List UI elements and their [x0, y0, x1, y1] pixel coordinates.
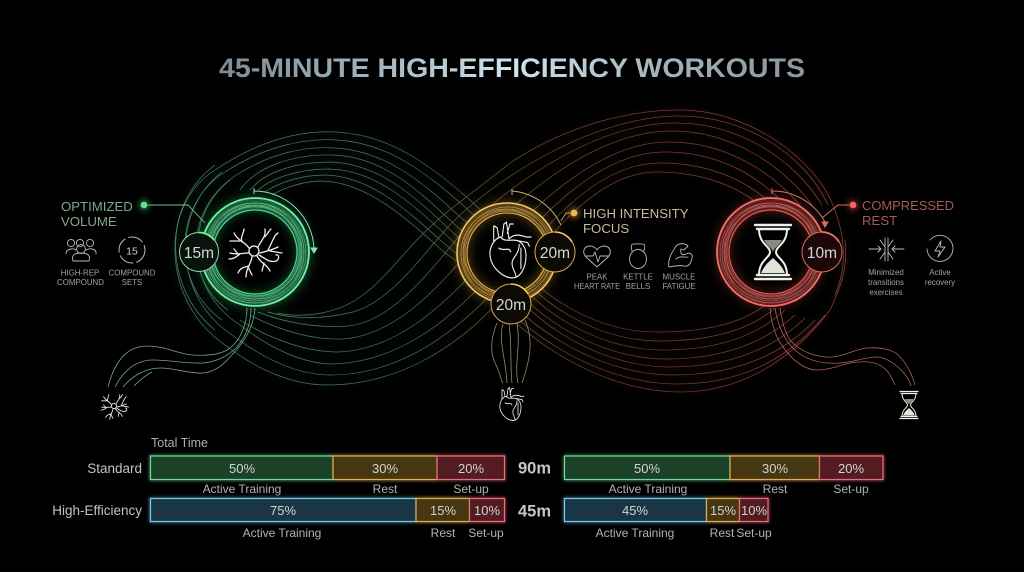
bar: standard right: 30% [762, 461, 788, 476]
tails: yellow to heart [492, 320, 530, 383]
bar: high-efficiency left: 75% [270, 503, 296, 518]
row label: standard: Standard [87, 461, 142, 476]
callout: high intensity focus: FOCUS [583, 221, 629, 236]
label: kettle bells: BELLS [626, 282, 650, 291]
icon: high-rep compound people [66, 239, 96, 261]
bar: standard left: 20% [458, 461, 484, 476]
callout: compressed rest: REST [862, 213, 897, 228]
labels: high-efficiency right: Active Training [596, 526, 674, 540]
icon: 15 compound sets [119, 237, 145, 263]
label: muscle fatigue [662, 272, 696, 291]
icon: muscle [669, 244, 692, 267]
bar: high-efficiency right: 10% [741, 503, 767, 518]
label: peak heart rate: HEART RATE [574, 282, 620, 291]
ring: green neuron [201, 198, 309, 306]
label: minimized transitions exercises: exercises [869, 288, 903, 297]
icon: small hourglass [900, 392, 918, 418]
labels: high-efficiency left: Rest [431, 526, 456, 540]
icon: active recovery [927, 235, 953, 261]
label: muscle fatigue: MUSCLE [663, 272, 695, 282]
label: peak heart rate: PEAK [586, 272, 608, 282]
time badge: 20m bottom: 20m [496, 297, 526, 314]
arrow: green arc [254, 188, 317, 253]
labels: high-efficiency left: Set-up [468, 526, 504, 540]
labels: standard right: Active Training [609, 482, 687, 496]
time badge: 15m [180, 232, 218, 272]
total: 90m: 90m [518, 460, 551, 478]
labels: high-efficiency left [243, 526, 504, 540]
arrow: yellow arc [512, 189, 561, 225]
time badge: 10m [802, 232, 842, 272]
labels: high-efficiency right: Set-up [736, 526, 772, 540]
icon: neuron [229, 229, 282, 277]
labels: high-efficiency right [596, 526, 772, 540]
row label: high-efficiency: High-Efficiency [52, 503, 142, 518]
labels: standard right: Rest [763, 482, 788, 496]
ring: red hourglass [717, 198, 825, 306]
icon: small heart [500, 388, 524, 420]
label: active recovery [925, 268, 955, 287]
ring: yellow heart [457, 203, 557, 303]
bar: high-efficiency left [150, 498, 504, 522]
callout: optimized volume: OPTIMIZED [61, 199, 133, 214]
callout: optimized volume: VOLUME [61, 214, 117, 229]
label: peak heart rate [574, 272, 620, 291]
icon: minimized transitions [869, 238, 904, 261]
time badge: 20m right: 20m [540, 245, 570, 262]
label: high-rep compound: COMPOUND [57, 278, 104, 287]
heading: total time: Total Time [151, 436, 208, 450]
callout: compressed rest: COMPRESSED [862, 198, 954, 213]
bar: high-efficiency left: 15% [430, 503, 456, 518]
icon: hourglass [755, 225, 791, 279]
labels: standard right [609, 482, 869, 496]
bar: standard left [150, 456, 504, 480]
bar: high-efficiency left: 10% [474, 503, 500, 518]
bar: high-efficiency right: 15% [710, 503, 736, 518]
arrow: red arc [772, 188, 828, 227]
bar: standard left: 50% [229, 461, 255, 476]
icon: peak heart rate [584, 246, 610, 267]
labels: standard left: Active Training [203, 482, 281, 496]
time badge: 10m: 10m [807, 245, 837, 262]
time badge: 20m right [535, 232, 575, 272]
label: compound sets: SETS [122, 278, 142, 287]
bar: standard right: 20% [838, 461, 864, 476]
labels: high-efficiency left: Active Training [243, 526, 321, 540]
label: minimized transitions exercises: Minimized [868, 268, 904, 277]
bar: standard left: 30% [372, 461, 398, 476]
title: 45-MINUTE HIGH-EFFICIENCY WORKOUTS [219, 53, 805, 83]
labels: standard left [203, 482, 489, 496]
label: minimized transitions exercises: transitions [868, 278, 904, 287]
callout: compressed rest [822, 198, 954, 228]
labels: standard left: Rest [373, 482, 398, 496]
icon: small neuron [101, 395, 129, 420]
bar: standard right: 50% [634, 461, 660, 476]
label: compound sets [109, 268, 156, 287]
label: high-rep compound: HIGH-REP [61, 268, 99, 278]
label: active recovery: recovery [925, 278, 955, 287]
tails: red to hourglass [770, 308, 915, 386]
label: kettle bells [623, 272, 653, 291]
labels: high-efficiency right: Rest [710, 526, 735, 540]
bar: high-efficiency right [564, 498, 768, 522]
labels: standard right: Set-up [833, 482, 869, 496]
callout: high intensity focus: HIGH INTENSITY [583, 206, 689, 221]
icon: kettlebell [630, 244, 646, 268]
icon: 15 compound sets: 15 [126, 246, 138, 258]
label: active recovery: Active [929, 268, 951, 277]
labels: standard left: Set-up [453, 482, 489, 496]
callout: high intensity focus [561, 206, 689, 236]
infinity flow lines [175, 110, 846, 392]
label: compound sets: COMPOUND [109, 268, 156, 278]
label: kettle bells: KETTLE [623, 272, 653, 282]
label: muscle fatigue: FATIGUE [662, 282, 696, 291]
bar: standard right [564, 456, 883, 480]
callout: optimized volume [61, 199, 205, 229]
label: high-rep compound [57, 268, 104, 287]
bar glow [150, 456, 883, 522]
tails: green to neuron [108, 308, 255, 387]
total: 45m: 45m [518, 502, 551, 520]
time badge: 20m bottom [491, 284, 531, 324]
label: minimized transitions exercises [868, 268, 904, 297]
bar: high-efficiency right: 45% [622, 503, 648, 518]
icon: heart [490, 222, 531, 278]
time badge: 15m: 15m [184, 245, 214, 262]
